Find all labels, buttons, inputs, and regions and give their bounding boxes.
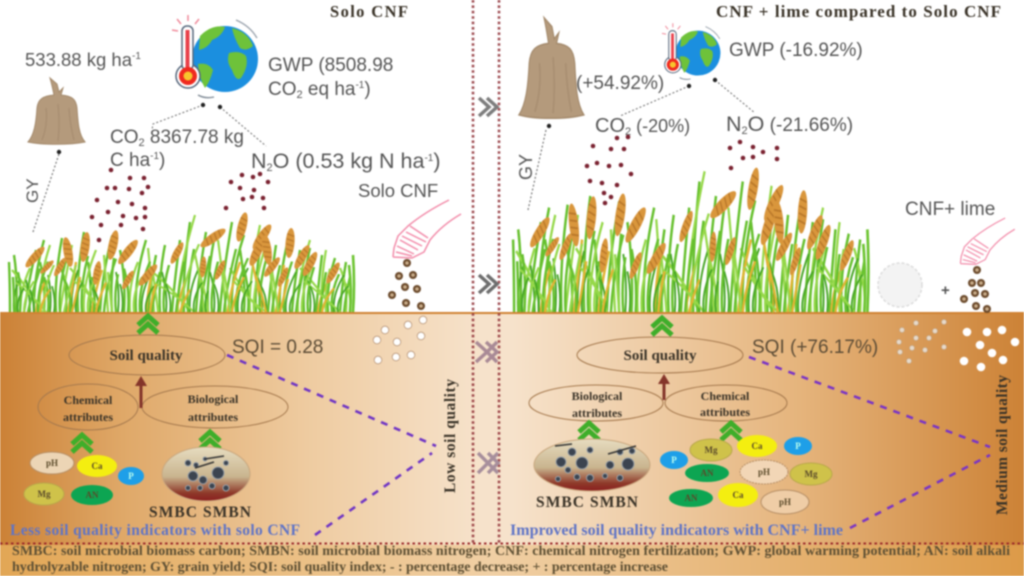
chemical indicators: Ca xyxy=(732,490,744,500)
SQI change: SQI (+76.17%) xyxy=(752,337,878,358)
biological attributes ellipse: Biological xyxy=(188,392,239,406)
GY label: GY xyxy=(516,154,536,180)
N2O value: 2 xyxy=(267,162,273,174)
chemical attributes ellipse xyxy=(38,384,138,430)
chemical indicators: P xyxy=(128,471,134,481)
icon: lime pile xyxy=(878,263,922,307)
icon: larger grain bag xyxy=(519,18,584,118)
chevrons: soil upper xyxy=(476,342,497,362)
panel: solo CNF soil xyxy=(10,316,459,539)
GWP change: GWP (-16.92%) xyxy=(729,40,863,61)
arrow: N2O to GWP xyxy=(713,78,755,113)
soil quality ellipse: Soil quality xyxy=(624,348,697,364)
SQI value: SQI = 0.28 xyxy=(232,337,323,358)
green chevron: chemical xyxy=(721,423,741,440)
grain yield value: -1 xyxy=(132,51,141,62)
CO2 value: 8367.78 kg xyxy=(145,127,244,148)
panel: CNF + lime soil xyxy=(510,318,1019,539)
chemical indicators: pH xyxy=(46,458,58,468)
icon: hand xyxy=(960,218,1015,264)
fertilizer label: CNF+ lime xyxy=(905,199,995,220)
chemical attributes ellipse: attributes xyxy=(63,410,113,424)
biological attributes ellipse: Biological xyxy=(572,389,623,403)
lime soil particles xyxy=(960,326,1019,371)
arrow: CO2 to GWP xyxy=(152,103,205,130)
arrow: attributes to soil quality xyxy=(658,374,670,400)
arrow: CO2 to GWP xyxy=(620,84,691,116)
CO2 value: -1 xyxy=(150,151,159,162)
dashed arrows: to medium soil quality xyxy=(749,357,990,528)
chemical indicators xyxy=(660,435,832,514)
divider: central dotted columns xyxy=(473,0,499,543)
chemical indicators: Ca xyxy=(92,461,103,471)
microbe labels: SMBC SMBN xyxy=(536,494,638,511)
GWP value: CO xyxy=(268,79,296,100)
vertical label: low soil quality: Low soil quality xyxy=(442,379,459,493)
rice field: solo CNF xyxy=(9,211,354,312)
soil quality ellipse: Soil quality xyxy=(110,348,183,364)
chemical attributes ellipse: attributes xyxy=(700,405,750,419)
N2O value: ) xyxy=(433,149,441,173)
biological attributes ellipse: attributes xyxy=(188,410,238,424)
chevrons: soil lower xyxy=(478,453,498,473)
icon: fertilizer pellets xyxy=(388,259,425,310)
green chevron: biological xyxy=(200,432,220,449)
chevrons: upper pair xyxy=(479,98,497,116)
chemical attributes ellipse: Chemical xyxy=(64,393,113,407)
panel: footnote band xyxy=(0,545,1024,576)
N2O value: N xyxy=(251,149,267,173)
fertilizer label: Solo CNF xyxy=(358,180,438,201)
heading: solo CNF: Solo CNF xyxy=(330,2,408,21)
CO2 change: CO xyxy=(595,115,625,137)
chemical indicators: Mg xyxy=(704,445,718,455)
soil quality ellipse xyxy=(69,335,225,375)
heading: CNF + lime compared: CNF + lime compared to Solo CNF xyxy=(716,2,1001,21)
GWP value: 2 xyxy=(296,89,303,101)
GWP value: eq ha xyxy=(303,79,356,100)
arrow: attributes to soil quality xyxy=(135,376,147,408)
panel: soil background xyxy=(0,313,1024,545)
microbe labels: SMBC SMBN xyxy=(149,504,251,521)
chemical indicators: pH xyxy=(779,497,791,507)
CO2 change: 2 xyxy=(625,126,631,138)
CO2 change: (-20%) xyxy=(631,116,690,136)
chevrons: lower pair xyxy=(479,275,497,293)
dashed arrows: to low soil quality xyxy=(227,355,436,535)
N2O change: (-21.66%) xyxy=(764,115,853,136)
green chevron: biological xyxy=(579,423,599,440)
N2O value: -1 xyxy=(424,153,434,164)
soil microbes xyxy=(162,447,250,501)
vertical label: medium soil quality: Medium soil quality xyxy=(994,375,1011,515)
chemical indicators: P xyxy=(795,441,801,451)
chemical indicators: Mg xyxy=(38,489,51,499)
CO2 value: ) xyxy=(159,150,165,171)
biological attributes ellipse xyxy=(142,386,288,428)
icon: smaller globe and thermometer xyxy=(662,23,720,79)
soil quality ellipse xyxy=(577,337,743,373)
footnote text: SMBC: soil microbial biomass carbon; SMBN: soil microbial biomass nitrogen; CNF: chemical nitrogen fertilization; GWP: global warming potential; AN: soil alkali xyxy=(12,544,1010,559)
GY label: GY xyxy=(23,178,42,203)
green chevron: to crop xyxy=(652,318,672,335)
N2O change: 2 xyxy=(742,125,748,137)
chemical indicators: Ca xyxy=(752,441,763,451)
rice field: CNF + lime xyxy=(513,166,868,312)
divider: horizontal dotted line xyxy=(0,542,1024,544)
N2O value: O (0.53 kg N ha xyxy=(273,149,424,173)
footnote text: hydrolyzable nitrogen; GY: grain yield; SQI: soil quality index; - : percentage decrease; + : percentage increase xyxy=(12,560,668,575)
CO2 emission dots xyxy=(90,168,150,242)
N2O change: O xyxy=(748,112,764,136)
chemical indicators: pH xyxy=(758,467,770,477)
chemical indicators: AN xyxy=(684,493,698,503)
icon: globe and thermometer xyxy=(172,15,258,98)
panel: solo CNF above-ground xyxy=(23,15,461,310)
icon: hand xyxy=(393,200,461,258)
blue caption: Improved soil quality indicators with CNF+ lime xyxy=(510,522,843,539)
icon: fertilizer pellets xyxy=(960,266,991,313)
chemical indicators xyxy=(24,452,144,505)
biological attributes ellipse xyxy=(529,385,663,421)
GWP value: GWP (8508.98 xyxy=(268,55,393,76)
grain yield change: (+54.92%) xyxy=(576,73,664,94)
chemical attributes ellipse xyxy=(665,385,787,421)
arrow: N2O to GWP xyxy=(218,105,266,146)
CO2 emission dots xyxy=(585,135,633,205)
arrow: grain yield xyxy=(33,150,61,232)
chemical indicators: AN xyxy=(86,490,99,500)
CO2 value: C ha xyxy=(110,150,151,171)
green chevron: to crop xyxy=(138,316,158,333)
faded soil particles xyxy=(896,320,946,364)
green chevron: chemical xyxy=(72,435,92,452)
arrow: grain yield xyxy=(528,124,551,210)
soil microbes xyxy=(534,439,650,491)
CO2 value: CO xyxy=(110,127,138,148)
GWP value: -1 xyxy=(355,80,365,91)
grain yield value: 533.88 kg ha xyxy=(25,49,132,70)
chemical attributes ellipse: Chemical xyxy=(701,389,750,403)
panel: CNF + lime above-ground xyxy=(516,18,1015,313)
N2O emission dots xyxy=(728,140,779,170)
chemical indicators: Mg xyxy=(804,469,818,479)
biological attributes ellipse: attributes xyxy=(572,406,622,420)
N2O emission dots xyxy=(224,172,270,210)
blue caption: Less soil quality indicators with solo CNF xyxy=(10,522,300,539)
N2O change: N xyxy=(726,112,742,136)
lime-free soil particles xyxy=(373,316,427,364)
chemical indicators: P xyxy=(671,455,677,465)
CO2 value: 2 xyxy=(138,137,145,149)
chemical indicators: AN xyxy=(700,468,714,478)
GWP value: ) xyxy=(364,79,371,100)
plus sign: + xyxy=(941,282,950,299)
icon: grain bag xyxy=(28,78,85,144)
